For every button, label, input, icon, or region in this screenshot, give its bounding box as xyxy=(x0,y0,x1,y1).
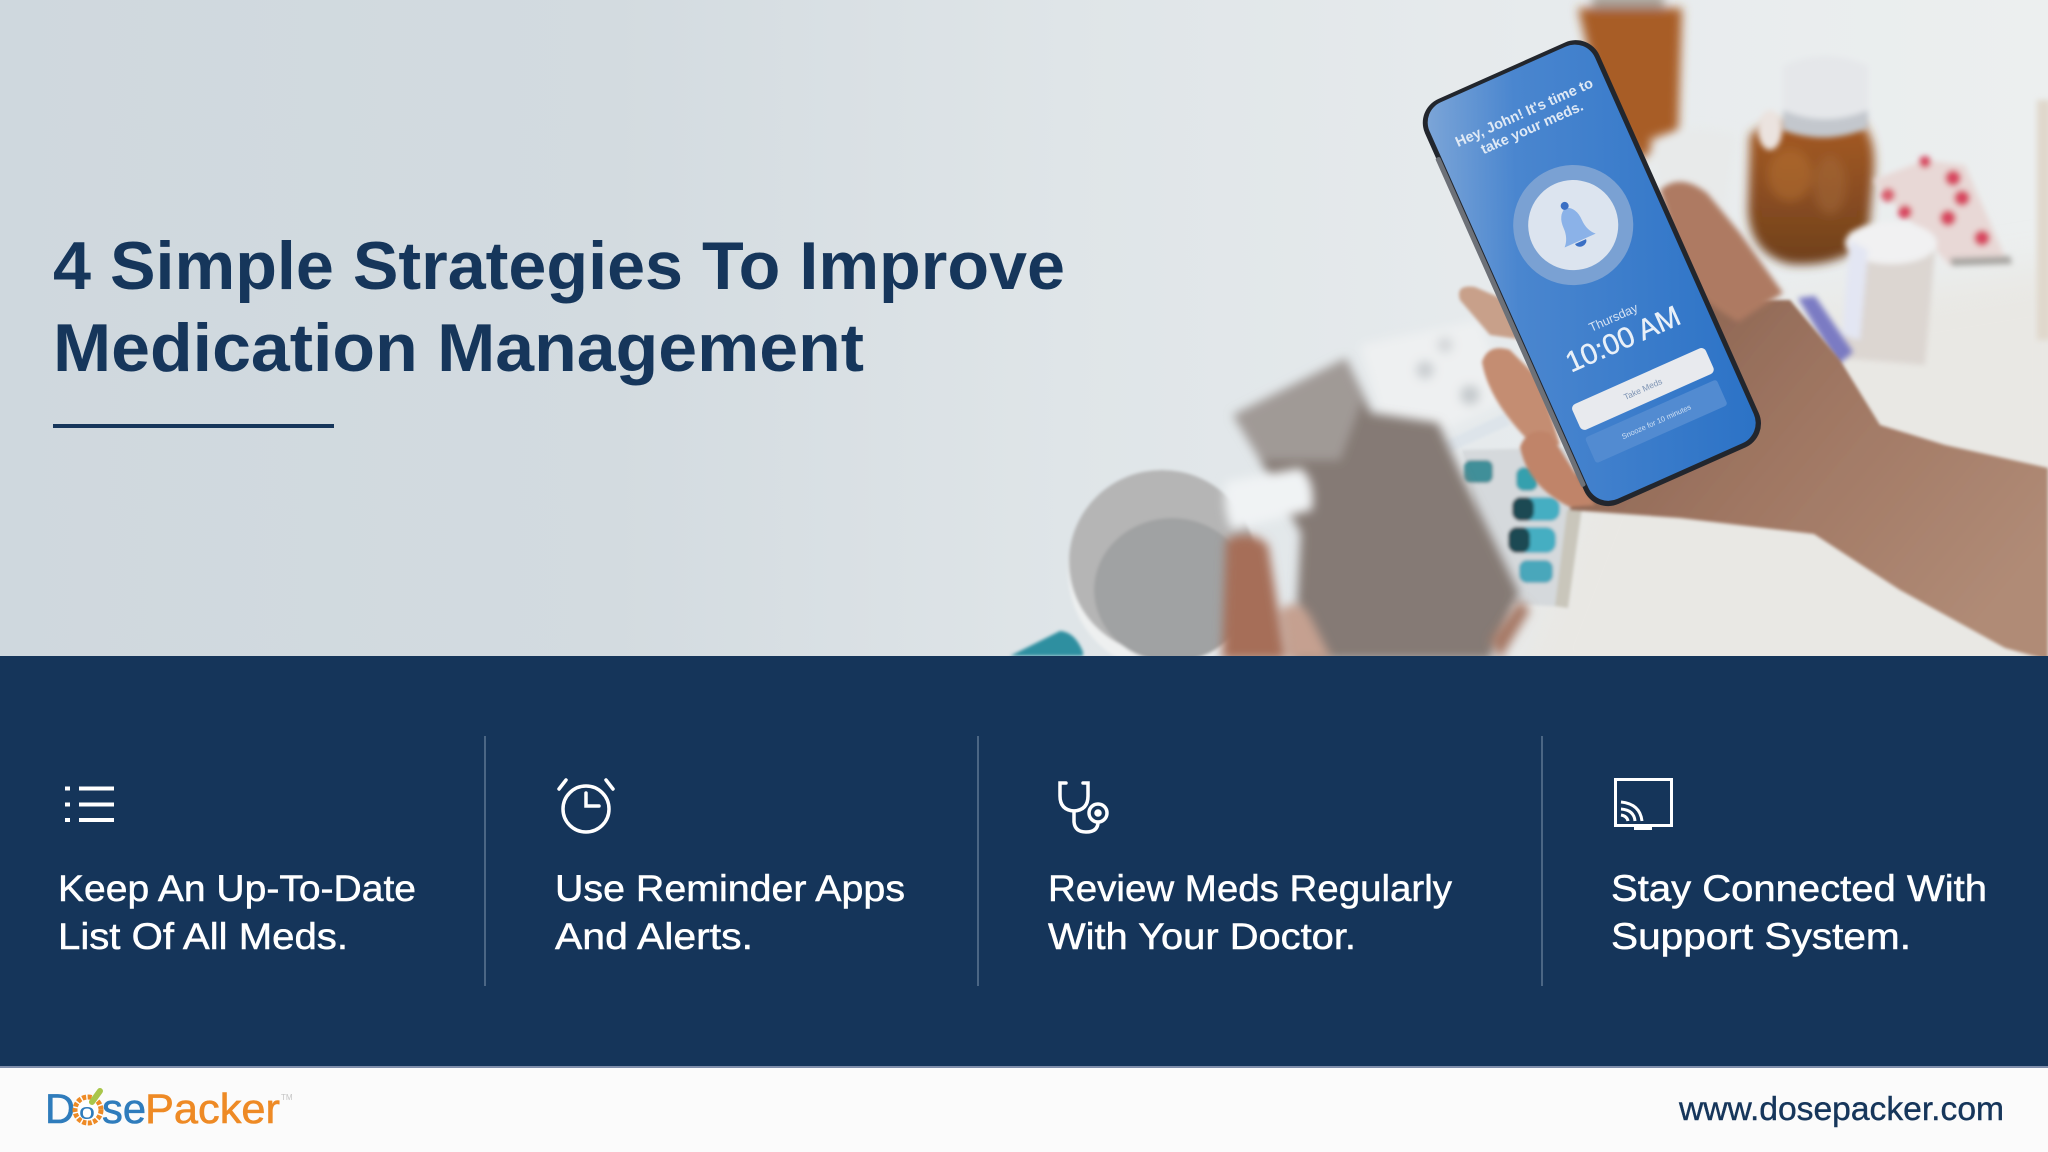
icon: alarm clock xyxy=(559,780,613,832)
red and white blister packet xyxy=(1873,156,2012,266)
strategy 1 text: List Of All Meds. xyxy=(58,916,348,957)
strategy 2: reminders xyxy=(555,780,905,957)
title: 4 Simple Strategies To Improve xyxy=(53,228,1065,304)
phone xyxy=(1414,32,1769,515)
icon: gear with pill xyxy=(75,1091,101,1124)
logo: DosePacker: D xyxy=(45,1085,75,1132)
fingers xyxy=(1459,287,1595,507)
logo: DosePacker xyxy=(45,1085,293,1132)
hero photo: hand holding phone with medication reminder xyxy=(0,0,2048,700)
take meds button: Take Meds xyxy=(1622,376,1664,402)
logo: DosePacker: Packer xyxy=(145,1085,280,1132)
bottle cap xyxy=(1754,108,1870,154)
logo: DosePacker: TM xyxy=(281,1093,293,1102)
pill bottle cap xyxy=(1225,468,1313,530)
icon: list xyxy=(65,788,114,820)
bell icon in circles xyxy=(1513,165,1634,286)
phone greeting text: take your meds. xyxy=(1479,99,1586,158)
strategy 3 text: With Your Doctor. xyxy=(1048,916,1356,957)
thumb xyxy=(1660,182,1783,322)
logo: DosePacker: se xyxy=(102,1085,146,1132)
day label: Thursday xyxy=(1587,300,1641,335)
white blister pack xyxy=(1368,329,1480,422)
strategy 3: doctor review xyxy=(1048,783,1453,957)
phone screen xyxy=(1421,38,1763,508)
strategy 3 text xyxy=(1048,868,1453,957)
strategy 2 text: Use Reminder Apps xyxy=(555,868,905,909)
strategy 4 text: Support System. xyxy=(1611,916,1911,957)
strategies panel xyxy=(0,656,2048,1068)
pill box held in front xyxy=(1233,358,1519,660)
drinking cup xyxy=(1068,470,1256,670)
strategy 2 text xyxy=(555,868,905,957)
icon: screen with signal xyxy=(1616,780,1672,830)
strategy 4 text xyxy=(1611,868,1987,957)
teal capsule blister pack xyxy=(1442,413,1582,608)
strategy 1 text xyxy=(58,868,416,957)
strategy 1: list xyxy=(58,788,416,957)
time: 10:00 AM xyxy=(1561,300,1685,379)
amber bottle, top xyxy=(1578,0,1682,160)
snooze button: Snooze for 10 minutes xyxy=(1620,402,1693,441)
palm and arm xyxy=(1568,296,2048,656)
hand and arm holding phone xyxy=(1459,182,2048,660)
take meds button xyxy=(1570,346,1715,431)
icon: stethoscope xyxy=(1060,783,1107,832)
snooze button xyxy=(1585,379,1728,463)
phone greeting text: Hey, John! It's time to xyxy=(1453,75,1596,151)
title: Medication Management xyxy=(53,310,864,386)
website url: www.dosepacker.com xyxy=(1678,1090,2004,1127)
strategy 1 text: Keep An Up-To-Date xyxy=(58,868,416,909)
strategy 4: support system xyxy=(1611,780,1987,957)
title underline xyxy=(53,424,334,428)
strategy 2 text: And Alerts. xyxy=(555,916,753,957)
footer bar xyxy=(0,1068,2048,1152)
strategy 4 text: Stay Connected With xyxy=(1611,868,1987,909)
teal object at bottom xyxy=(1010,631,1083,656)
strategy 3 text: Review Meds Regularly xyxy=(1048,868,1453,909)
white bottle, right xyxy=(1842,222,1937,365)
white cup behind phone xyxy=(1643,124,1685,159)
title xyxy=(53,228,1065,386)
amber bottle, right xyxy=(1748,122,1874,264)
purple object xyxy=(1798,296,1853,365)
icon: gear with pill: o xyxy=(79,1099,95,1124)
hand holding pill box xyxy=(1222,535,1530,660)
